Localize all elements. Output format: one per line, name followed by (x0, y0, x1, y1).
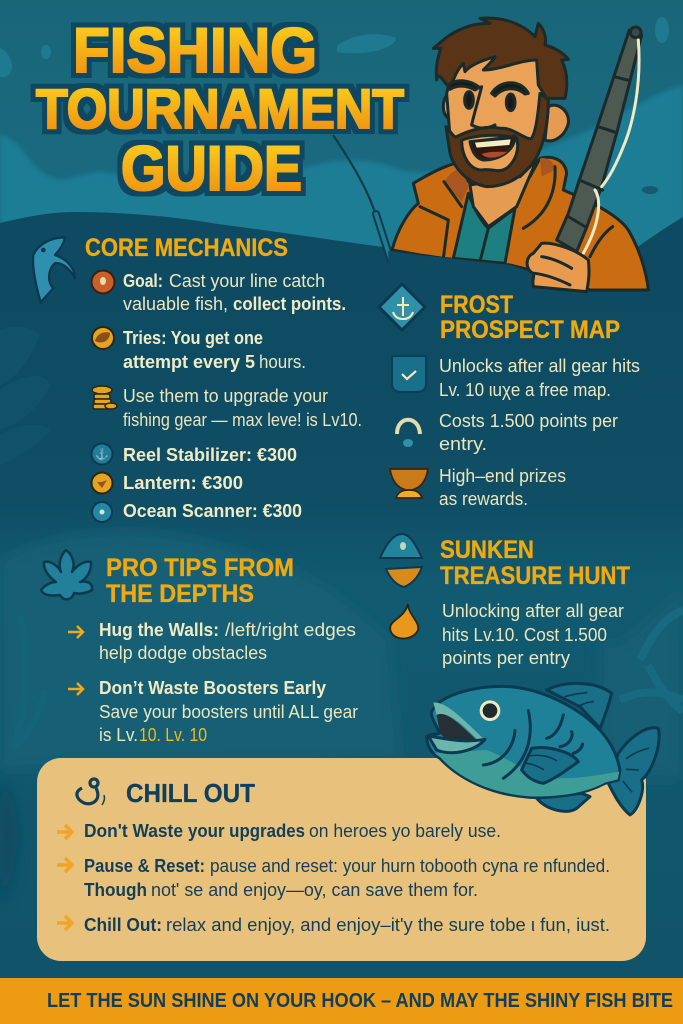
title (36, 16, 404, 204)
dorsal fin (547, 683, 612, 728)
unlock text (439, 356, 640, 400)
item text: your upgrades (188, 821, 305, 841)
cost text: entry. (439, 434, 487, 454)
goal text: Goal: (123, 271, 163, 291)
scanner text: Ocean Scanner: €300 (123, 501, 302, 521)
footer banner (0, 978, 683, 1024)
icon: goal (92, 270, 114, 294)
goal text: collect points. (233, 294, 346, 314)
treasure text: points per entry (442, 648, 570, 668)
icon: tries (92, 327, 114, 349)
icon: lantern (92, 472, 112, 494)
upper lip (433, 702, 483, 741)
item text: relax and enjoy, and enjoy–it'y the sure tobe ι fun, iust. (166, 915, 610, 935)
icon: reel stabilizer (92, 444, 112, 464)
tip text: hug the walls: help dodge obstacles (99, 643, 267, 663)
tip text: hug the walls: /left/right edges (225, 620, 356, 640)
heading: PRO TIPS FROM (106, 554, 294, 582)
tries text: hours. (259, 352, 306, 372)
icon: dome (397, 420, 420, 447)
upgrade text: Use them to upgrade your (123, 386, 328, 406)
tail (608, 728, 659, 815)
icon: coral (41, 550, 92, 599)
bottom fin (537, 793, 590, 811)
tip text: hug the walls (99, 620, 356, 663)
arrow (57, 916, 72, 930)
item text: Chill Out: (84, 915, 162, 935)
fish illustration (427, 683, 659, 815)
angler illustration (388, 18, 648, 297)
item text (84, 821, 501, 841)
nose (472, 87, 495, 128)
heading (106, 554, 294, 608)
gills (483, 711, 583, 778)
heading: CORE MECHANICS (85, 234, 288, 262)
mouth (437, 714, 478, 744)
icon: reel stabilizer: ⚓ (95, 448, 109, 461)
title: GUIDE (121, 134, 302, 204)
hair (433, 18, 568, 98)
icon: dolphin (33, 238, 75, 302)
beard (446, 93, 548, 187)
cost text: Costs 1.500 points per (439, 411, 618, 431)
cost text (439, 411, 618, 454)
icon: coins (92, 386, 117, 409)
item text: on heroes yo barely use. (309, 821, 501, 841)
panel: pro tips (41, 550, 358, 745)
upgrade text (123, 386, 362, 430)
belly (435, 750, 619, 796)
prizes text (439, 466, 566, 509)
treasure text (442, 601, 624, 668)
tip text: boosters: Save your boosters until ALL gear (99, 702, 358, 722)
rod in background (333, 135, 391, 261)
tries text: Tries: You get one (123, 328, 263, 348)
tip text: boosters: is Lv. (99, 725, 138, 745)
wave overlap (388, 251, 587, 297)
hand (527, 243, 589, 292)
prizes text: as rewards. (439, 489, 528, 509)
heading: FROST (440, 291, 513, 319)
brows (448, 81, 479, 90)
arrow (57, 858, 72, 872)
panel: core mechanics (33, 234, 362, 522)
item text: Though (84, 880, 147, 900)
panel: frost prospect map (379, 284, 640, 509)
face (447, 56, 545, 143)
heading: CHILL OUT (126, 778, 255, 808)
unlock text: Lv. 10 ιuχe a free map. (439, 380, 611, 400)
neck (470, 160, 537, 227)
heading: SUNKEN (440, 536, 534, 564)
mouth (470, 136, 515, 160)
goal text: valuable fish, (123, 294, 228, 314)
item text: Pause & Reset: (84, 856, 205, 876)
eyes (465, 92, 473, 108)
heading (440, 536, 630, 590)
tip text: hug the walls: Hug the Walls: (99, 620, 219, 640)
heading (440, 291, 620, 344)
chin (462, 135, 518, 171)
upgrade text: fishing gear — max leve! is Lv10. (123, 410, 362, 430)
ears (545, 105, 568, 141)
rod (557, 30, 642, 252)
icon: trophy cup (390, 469, 428, 498)
eye (480, 700, 500, 721)
panel: sunken treasure hunt (380, 534, 630, 668)
tries text (123, 328, 306, 372)
icon: check badge (392, 356, 426, 392)
card (37, 758, 646, 961)
panel: chill out (37, 758, 646, 961)
shirt (453, 193, 515, 263)
item text: not' se and enjoy—oy, can save them for. (151, 880, 478, 900)
goal text (123, 271, 346, 314)
reel text: Reel Stabilizer: €300 (123, 445, 297, 465)
icon: hook (77, 779, 104, 805)
body (427, 686, 620, 797)
jacket (392, 157, 648, 290)
unlock text: Unlocks after all gear hits (439, 356, 640, 376)
tip text: boosters (99, 678, 358, 745)
treasure text: hits Lv.10. Cost 1.500 (442, 625, 607, 645)
icon: flame (390, 604, 418, 639)
heading: PROSPECT MAP (440, 316, 620, 344)
heading: THE DEPTHS (106, 580, 254, 608)
arrow (68, 683, 83, 695)
arrow (68, 626, 83, 638)
item text: pause and reset: your hurn tobooth cyna re nfunded. (210, 856, 610, 876)
treasure text: Unlocking after all gear (442, 601, 624, 621)
tries text: attempt every 5 (123, 352, 255, 372)
title: TOURNAMENT (36, 77, 404, 140)
tip text: boosters: 10. Lv. 10 (139, 725, 207, 745)
tip text: boosters: Don’t Waste Boosters Early (99, 678, 326, 698)
arrow (57, 825, 72, 839)
lantern text: Lantern: €300 (123, 473, 243, 493)
title: FISHING (73, 16, 317, 86)
item text (84, 856, 610, 900)
icon: treasure shell (380, 534, 422, 587)
icon: ocean scanner (92, 502, 112, 522)
pectoral fin (522, 748, 578, 783)
icon: anchor diamond (379, 284, 425, 330)
prizes text: High–end prizes (439, 466, 566, 486)
lower jaw (428, 736, 485, 753)
item text: Don't Waste (84, 821, 183, 841)
goal text: Cast your line catch (169, 271, 325, 291)
heading: TREASURE HUNT (440, 562, 630, 590)
